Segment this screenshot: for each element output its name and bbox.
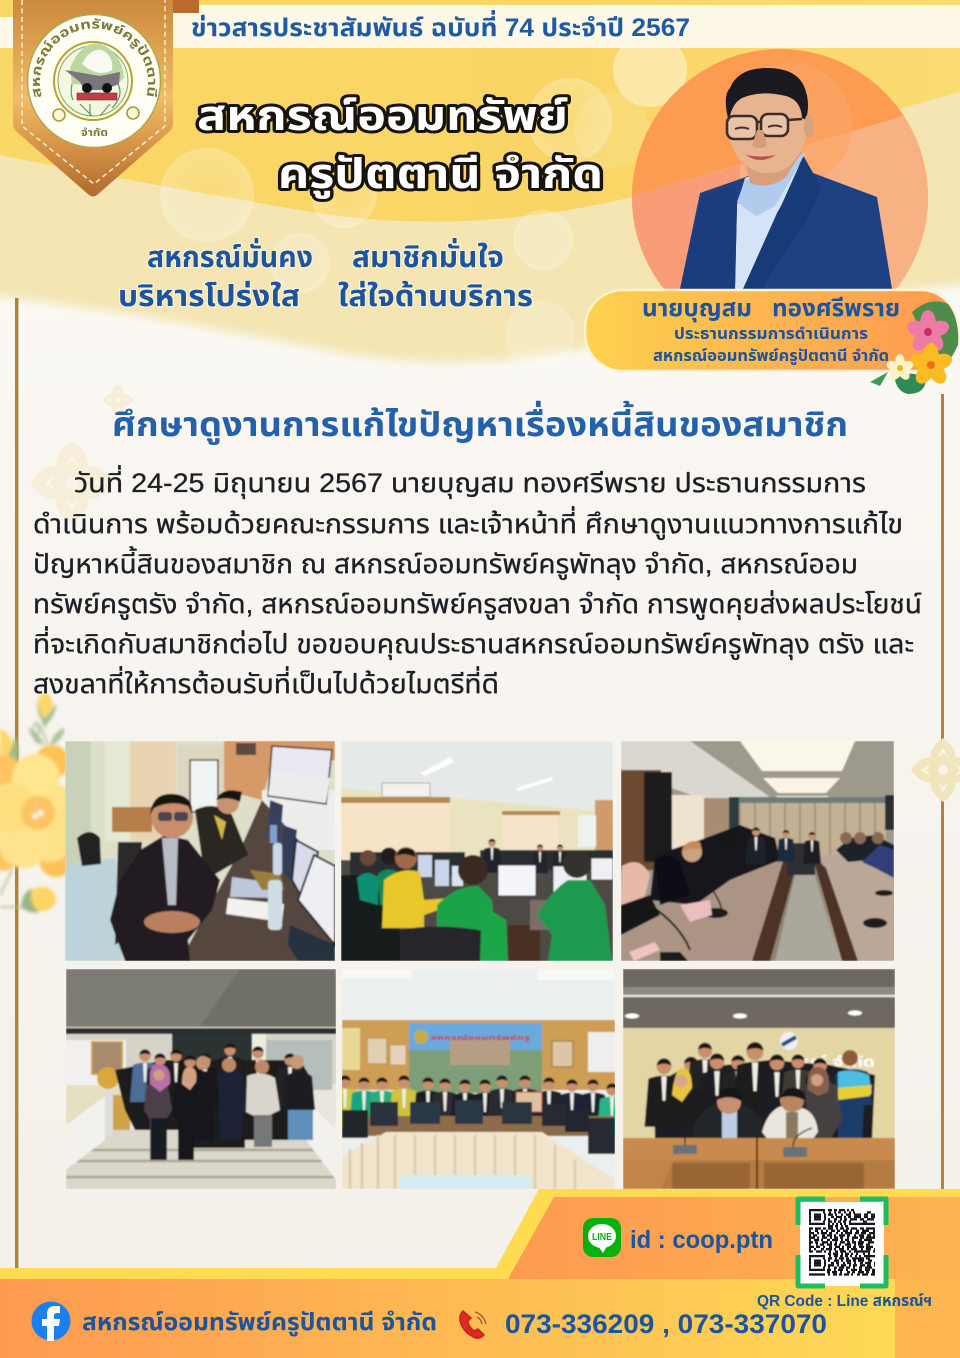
frame lines (15, 298, 18, 1268)
slogan: สหกรณ์มั่นคง (147, 237, 313, 274)
chairman name plate (585, 290, 958, 371)
icon: LINE: LINE (592, 1232, 612, 1243)
logo: coop seal: สหกรณ์ออมทรัพย์ครูปัตตานี (32, 18, 158, 97)
decorative ornaments (30, 384, 134, 525)
newsletter issue banner: ข่าวสารประชาสัมพันธ์ ฉบับที่ 74 ประจำปี 2567 (191, 10, 690, 42)
body text: วันที่ 24-25 มิถุนายน 2567 นายบุญสม ทองศรีพราย ประธานกรรมการ (74, 465, 866, 499)
organisation title: ครูปัตตานี จำกัด (278, 150, 603, 199)
body text (33, 465, 922, 699)
photo 6: group behind wooden table: รณ์ จำกัด (800, 1054, 875, 1071)
body text: ดำเนินการ พร้อมด้วยคณะกรรมการ และเจ้าหน้าที่ ศึกษาดูงานแนวทางการแก้ไข (33, 506, 903, 540)
phone numbers: 073-336209 , 073-337070 (505, 1309, 827, 1339)
main heading: ศึกษาดูงานการแก้ไขปัญหาเรื่องหนี้สินของสมาชิก (112, 400, 848, 445)
slogan: สมาชิกมั่นใจ (352, 237, 504, 274)
organisation title (197, 92, 603, 199)
slogan: บริหารโปร่งใส (118, 281, 300, 313)
photo 2: members in green and yellow at computers (341, 741, 613, 961)
photo 5: signing ceremony group (330, 969, 627, 1189)
QR code (798, 1199, 886, 1286)
organisation title: สหกรณ์ออมทรัพย์ (197, 92, 568, 139)
icon: facebook (32, 1302, 70, 1341)
ribbon with logo (13, 0, 199, 196)
icon: LINE (583, 1218, 621, 1257)
photo 6: group behind wooden table (623, 969, 895, 1189)
chairman portrait (680, 68, 892, 289)
body text: ที่จะเกิดกับสมาชิกต่อไป ขอขอบคุณประธานสหกรณ์ออมทรัพย์ครูพัทลุง ตรัง และ (33, 626, 914, 660)
body text: ปัญหาหนี้สินของสมาชิก ณ สหกรณ์ออมทรัพย์ครูพัทลุง จำกัด, สหกรณ์ออม (33, 546, 858, 580)
slogan: ใส่ใจด้านบริการ (338, 281, 533, 313)
icon: yellow flowers left (0, 691, 65, 914)
photo 4: group on building steps (66, 969, 336, 1189)
body text: ทรัพย์ครูตรัง จำกัด, สหกรณ์ออมทรัพย์ครูสงขลา จำกัด การพูดคุยส่งผลประโยชน์ (33, 589, 922, 620)
QR caption: QR Code : Line สหกรณ์ฯ (757, 1293, 932, 1310)
icon: tropical flowers (870, 301, 958, 394)
chairman name plate: นายบุญสม (642, 295, 752, 323)
logo: coop seal: จำกัด (81, 127, 108, 139)
footer upper panel: line contact (490, 1189, 960, 1279)
chairman name plate: ประธานกรรมการดำเนินการ (674, 326, 868, 343)
chairman name plate: ทองศรีพราย (772, 295, 900, 322)
icon: phone (460, 1311, 486, 1338)
icon: gold ornament right (911, 738, 960, 802)
footer upper panel: line contact: id : coop.ptn (630, 1226, 773, 1254)
facebook page name: สหกรณ์ออมทรัพย์ครูปัตตานี จำกัด (82, 1309, 437, 1337)
footer lower band (0, 1268, 960, 1358)
chairman name plate: สหกรณ์ออมทรัพย์ครูปัตตานี จำกัด (653, 348, 889, 366)
slogan (118, 237, 533, 313)
header background waves (0, 0, 960, 370)
logo: coop seal (26, 14, 162, 148)
body text: สงขลาที่ให้การต้อนรับที่เป็นไปด้วยไมตรีที่ดี (33, 666, 499, 699)
newsletter issue banner (0, 5, 960, 48)
portrait circle with chairman (632, 49, 928, 289)
photo 5: signing ceremony group: สหกรณ์ออมทรัพย์ครู (430, 1034, 531, 1042)
photo 1: chairman seated at meeting desk (65, 741, 335, 961)
photo 3: long conference table (621, 741, 895, 961)
